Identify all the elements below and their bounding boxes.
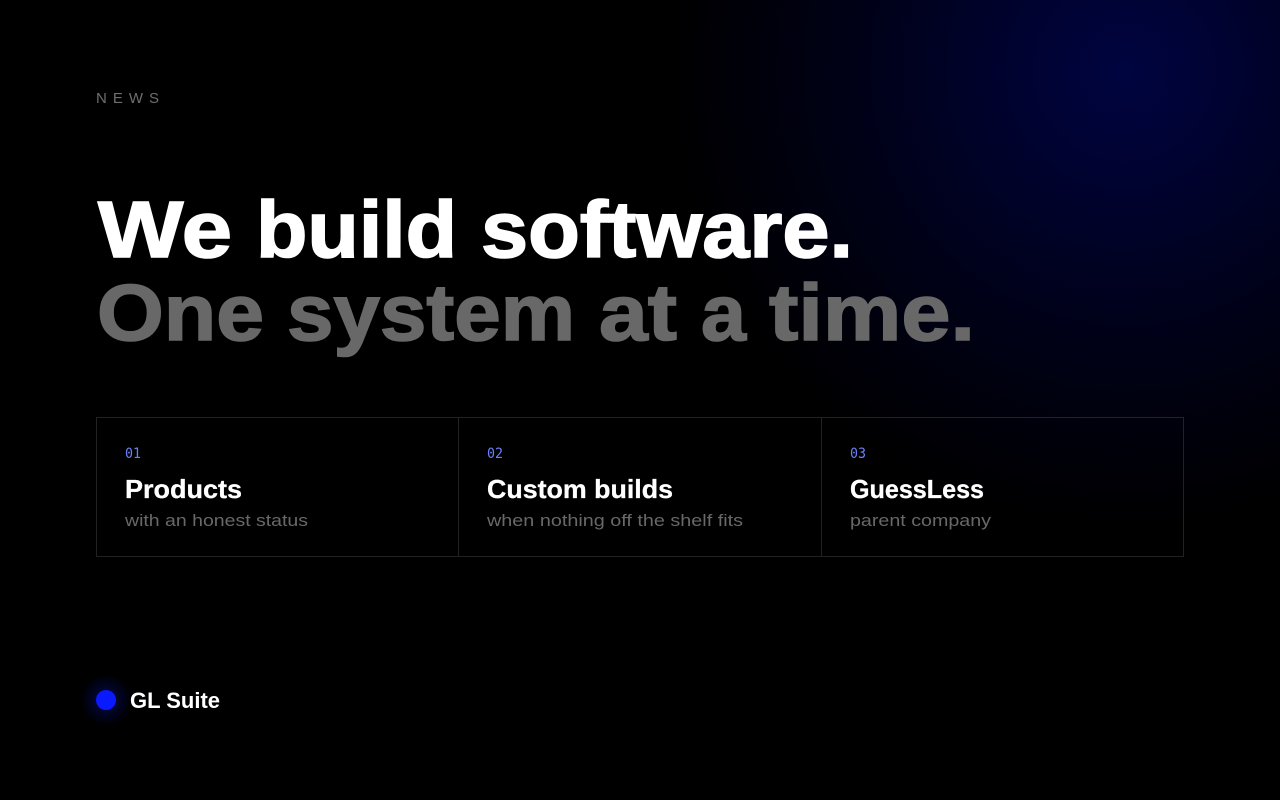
headline line 2: a (701, 268, 747, 357)
card 2 (486, 446, 743, 530)
headline line 1: software. (481, 185, 853, 274)
headline line 2: time. (769, 268, 975, 357)
panel: three-column cards (96, 418, 1184, 556)
headline (97, 185, 975, 357)
eyebrow label: NEWS (96, 90, 159, 107)
card 3 (850, 446, 992, 530)
number 02: 02 (487, 446, 503, 462)
headline line 1 (98, 185, 853, 274)
description: when nothing off the shelf fits (486, 511, 743, 530)
headline line 2: at (599, 268, 677, 357)
brand name: GL Suite (130, 688, 220, 713)
headline line 1: build (256, 185, 457, 274)
heading Products: Products (125, 474, 242, 504)
brand footer (80, 674, 220, 726)
number 03: 03 (850, 446, 866, 462)
number 01: 01 (125, 446, 141, 462)
card 1 (124, 446, 308, 530)
headline line 2: system (287, 268, 575, 357)
card frame (96, 418, 1184, 556)
headline line 2: One (97, 268, 264, 357)
heading Custom builds: Custom builds (487, 474, 673, 504)
description: with an honest status (124, 511, 308, 530)
description: parent company (850, 511, 992, 530)
heading GuessLess: GuessLess (850, 474, 984, 504)
icon: glowing blue dot (80, 674, 132, 726)
headline line 2 (97, 268, 975, 357)
headline line 1: We (98, 185, 232, 274)
